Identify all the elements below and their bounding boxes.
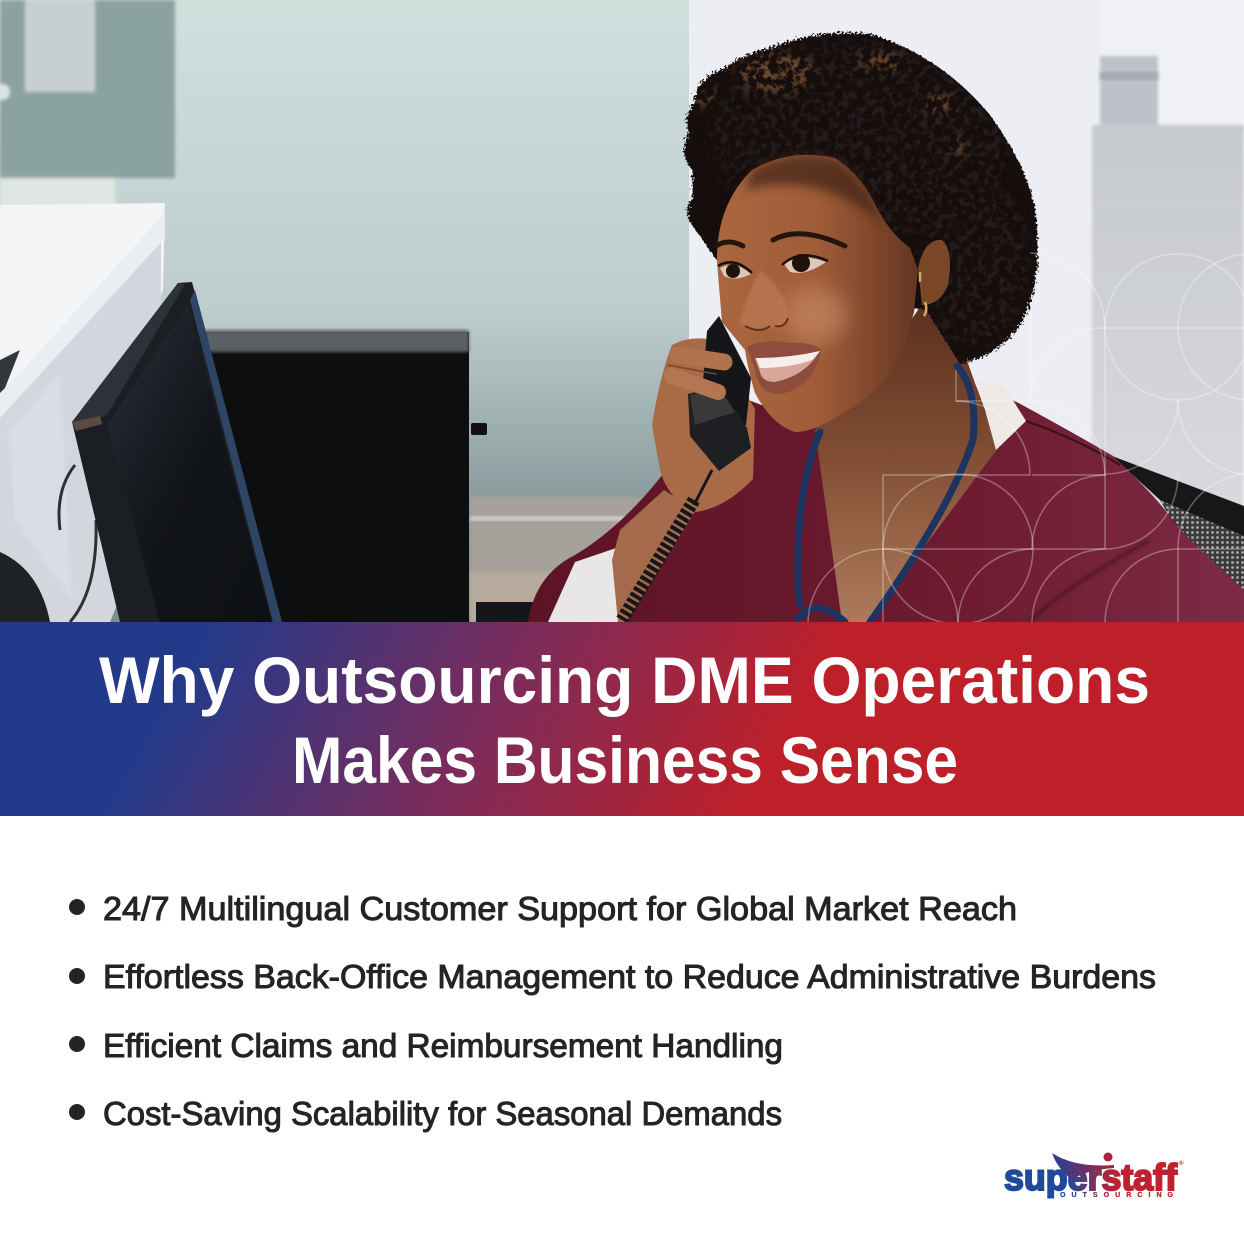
stethoscope [797, 366, 974, 622]
bullet 3: Efficient Claims and Reimbursement Handling [103, 1027, 783, 1064]
coiled phone cord [622, 470, 712, 620]
face [717, 155, 918, 432]
eyebrows [716, 234, 845, 246]
palm behind phone [652, 338, 755, 512]
bullet list [69, 890, 1156, 1132]
raised forearm [612, 490, 696, 622]
bullet 1: 24/7 Multilingual Customer Support for Global Market Reach [103, 890, 1017, 927]
rear computer monitor [205, 330, 487, 622]
logo tagline: OUTSOURCING [1060, 1192, 1174, 1199]
fingers over phone [668, 355, 724, 392]
hair curl texture [710, 40, 1030, 350]
bullet 2: Effortless Back-Office Management to Reduce Administrative Burdens [103, 958, 1156, 995]
title line 2: Makes Business Sense [292, 723, 958, 797]
title banner [0, 622, 1244, 816]
front computer monitor [72, 282, 282, 622]
blurred glass panel and wall switch [0, 0, 175, 208]
eyes [718, 254, 828, 279]
hair [684, 33, 1038, 364]
smile [747, 341, 821, 394]
hair texture and highlights [692, 40, 1030, 350]
neck and chest [815, 300, 998, 622]
background wall [0, 0, 1244, 622]
photo: nurse on the phone at a desk [0, 0, 1244, 624]
white desk [0, 203, 165, 622]
decorative geometric line pattern [808, 253, 1244, 624]
logo dot [1104, 1152, 1112, 1162]
logo: superstaff outsourcing [1004, 1152, 1184, 1199]
logo registered mark: ® [1179, 1160, 1184, 1167]
white undershirt collar [974, 380, 1026, 450]
hair highlights [692, 52, 966, 156]
telephone handset [688, 316, 751, 471]
logo swoosh [1052, 1153, 1114, 1180]
logo wordmark: superstaff [1004, 1157, 1178, 1198]
white shirt cuff [548, 546, 622, 622]
ear [918, 240, 950, 305]
cheek highlight [783, 287, 847, 343]
head [684, 33, 1038, 432]
bullet 4: Cost-Saving Scalability for Seasonal Demands [103, 1095, 782, 1132]
earrings [920, 272, 926, 316]
burgundy scrubs [528, 385, 1244, 622]
forehead shadow [745, 155, 885, 225]
title line 1: Why Outsourcing DME Operations [99, 643, 1150, 717]
nose [739, 270, 788, 329]
